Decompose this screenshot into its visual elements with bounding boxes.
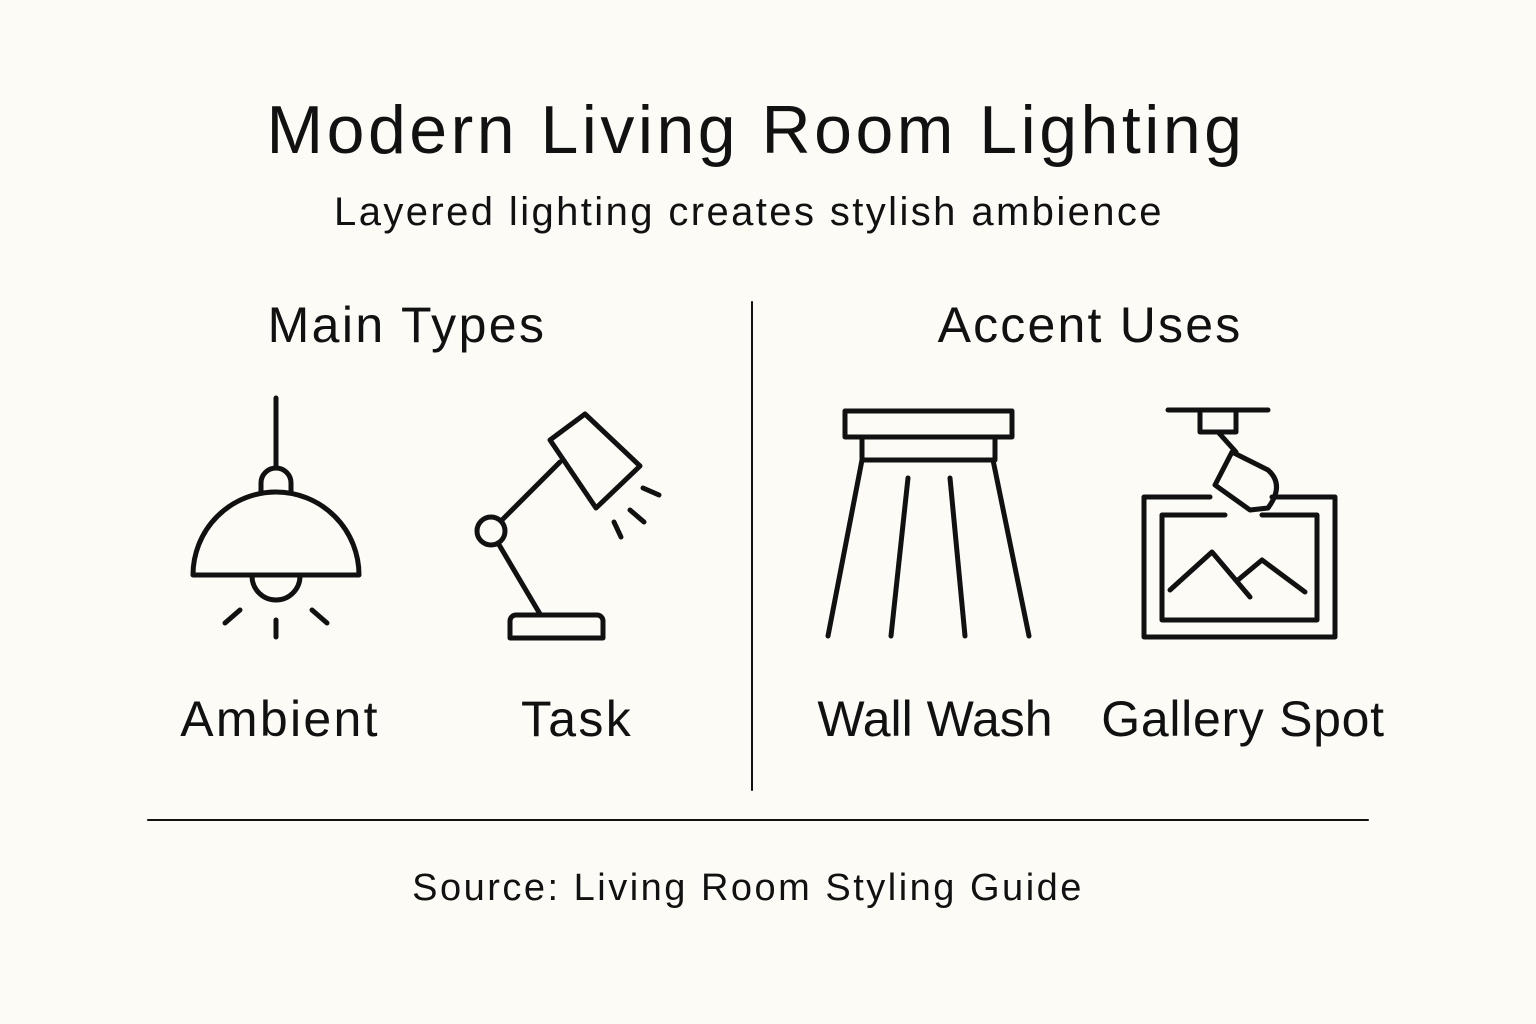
label: ambient: Ambient [180,691,380,747]
label: wall wash: Wall Wash [817,691,1053,747]
icon: wall wash [828,411,1029,636]
icon: gallery spot [1144,410,1335,637]
title: Modern Living Room Lighting [266,92,1246,168]
heading: accent uses: Accent Uses [938,297,1242,353]
icon: desk lamp [477,414,659,638]
label: task: Task [521,691,633,747]
subtitle: Layered lighting creates stylish ambience [334,190,1164,234]
label: gallery spot: Gallery Spot [1101,691,1385,747]
icon: pendant lamp [193,398,359,637]
source: Source: Living Room Styling Guide [412,867,1084,909]
heading: main types: Main Types [268,297,546,353]
